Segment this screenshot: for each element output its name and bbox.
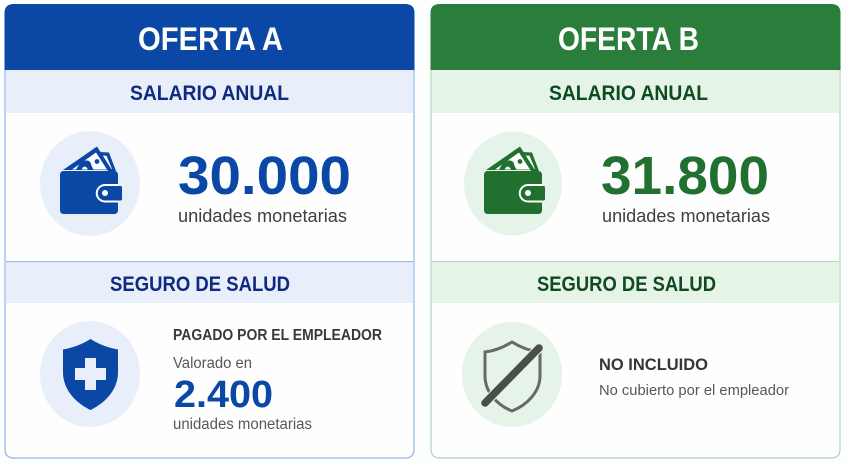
- icon: crossed-out shield: [462, 322, 562, 427]
- section heading: salario anual: SALARIO ANUAL: [130, 82, 289, 105]
- text: no incluido: No cubierto por el empleador: [599, 382, 789, 399]
- text: pagado por el empleador: 2.400: [174, 374, 273, 416]
- section heading: seguro de salud: SEGURO DE SALUD: [110, 273, 290, 296]
- panel: Oferta B: [430, 4, 840, 458]
- header: Oferta A: [4, 4, 414, 70]
- section heading: salario anual: [432, 70, 839, 113]
- text: pagado por el empleador: Valorado en: [173, 355, 252, 372]
- text: pagado por el empleador: PAGADO POR EL EMPLEADOR: [173, 327, 382, 344]
- header: Oferta B: OFERTA B: [558, 21, 699, 57]
- text: no incluido: NO INCLUIDO: [599, 355, 708, 374]
- value: 31.800 unidades monetarias: 31.800: [601, 146, 769, 206]
- value: 31.800 unidades monetarias: unidades monetarias: [602, 206, 770, 226]
- panel: Oferta A: [4, 4, 414, 458]
- section heading: seguro de salud: [432, 261, 839, 303]
- icon: wallet with banknotes: [40, 131, 140, 236]
- header: Oferta A: OFERTA A: [138, 21, 283, 57]
- value: 30.000 unidades monetarias: 30.000: [178, 146, 351, 206]
- icon: shield with cross: [40, 321, 140, 427]
- section heading: salario anual: [6, 70, 413, 113]
- section heading: seguro de salud: [6, 261, 413, 303]
- header: Oferta B: [430, 4, 840, 70]
- text: pagado por el empleador: unidades monetarias: [173, 416, 312, 433]
- text: no incluido: [599, 355, 789, 399]
- section heading: salario anual: SALARIO ANUAL: [549, 82, 708, 105]
- value: 30.000 unidades monetarias: unidades monetarias: [178, 206, 347, 226]
- icon: wallet with banknotes: [464, 132, 562, 236]
- text: pagado por el empleador: [173, 327, 382, 433]
- section heading: seguro de salud: SEGURO DE SALUD: [537, 273, 716, 296]
